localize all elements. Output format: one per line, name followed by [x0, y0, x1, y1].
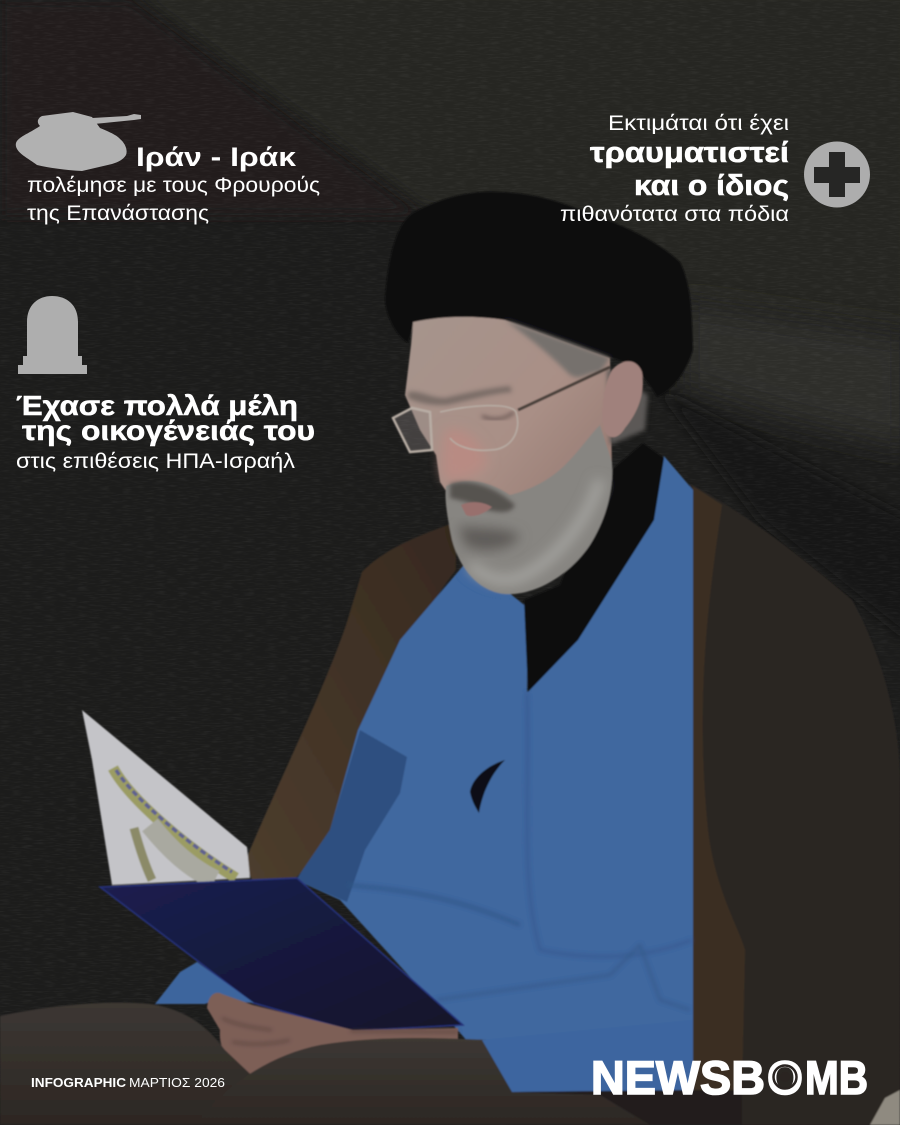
robe opening	[470, 760, 505, 813]
footer credit	[31, 1076, 225, 1090]
beard	[445, 425, 612, 594]
turban	[385, 192, 693, 397]
dark sleeve under arm	[296, 730, 407, 902]
top-left block: Iran-Iraq war	[16, 112, 320, 225]
hands	[207, 993, 458, 1078]
text: probably in the legs: πιθανότατα στα πόδια	[560, 203, 789, 226]
icon: medical cross	[804, 142, 870, 208]
lips	[461, 502, 492, 516]
heading: been injured: τραυματιστεί	[590, 137, 789, 169]
text: fought with the Revolutionary Guards: πολέμησε με τους Φρουρούς	[27, 174, 320, 197]
book pages	[82, 710, 250, 885]
nose	[442, 429, 488, 480]
top-right block: injury	[560, 112, 870, 226]
heading: lost many members: Έχασε πολλά μέλη	[16, 390, 298, 421]
text: in the US-Israel strikes: στις επιθέσεις ΗΠΑ-Ισραήλ	[16, 450, 296, 473]
right thigh	[195, 1038, 650, 1125]
beige corner	[870, 1090, 900, 1125]
icon: tank	[16, 112, 141, 171]
sleeve lower left	[155, 962, 254, 1004]
text: second line: της Επανάστασης	[27, 202, 209, 225]
left knee	[0, 1003, 262, 1125]
blue hem lower	[482, 1020, 693, 1092]
dark gap under robe	[512, 1090, 742, 1125]
face	[405, 317, 612, 560]
ear	[602, 361, 643, 437]
text: estimated that he has: Εκτιμάται ότι έχει	[608, 112, 789, 135]
heading: Iran - Iraq: Ιράν - Ιράκ	[136, 142, 297, 172]
logo: Newsbomb	[591, 1051, 868, 1104]
black under-collar	[524, 443, 664, 692]
cloak left side	[245, 522, 456, 880]
hair at temple	[505, 320, 610, 377]
footer credit: INFOGRAPHIC	[31, 1076, 126, 1090]
eye	[482, 412, 514, 419]
logo: Newsbomb: O	[767, 1051, 803, 1104]
logo: Newsbomb: MB	[805, 1051, 868, 1104]
glasses	[393, 367, 610, 452]
left block: family losses	[16, 296, 315, 473]
heading: himself too: και ο ίδιος	[634, 170, 789, 202]
cloak right side	[600, 484, 900, 1125]
page ornament	[113, 768, 236, 880]
blue robe	[296, 456, 693, 1092]
logo: Newsbomb: NEWSB	[591, 1051, 765, 1104]
footer credit: ΜΑΡΤΙΟΣ 2026	[129, 1076, 225, 1090]
heading: of his family: της οικογένειάς του	[22, 415, 315, 446]
book cover	[100, 878, 463, 1031]
icon: gravestone	[18, 296, 87, 374]
robe folds	[348, 885, 520, 925]
cloak brown edge	[675, 486, 745, 1090]
eyebrows	[408, 386, 512, 405]
